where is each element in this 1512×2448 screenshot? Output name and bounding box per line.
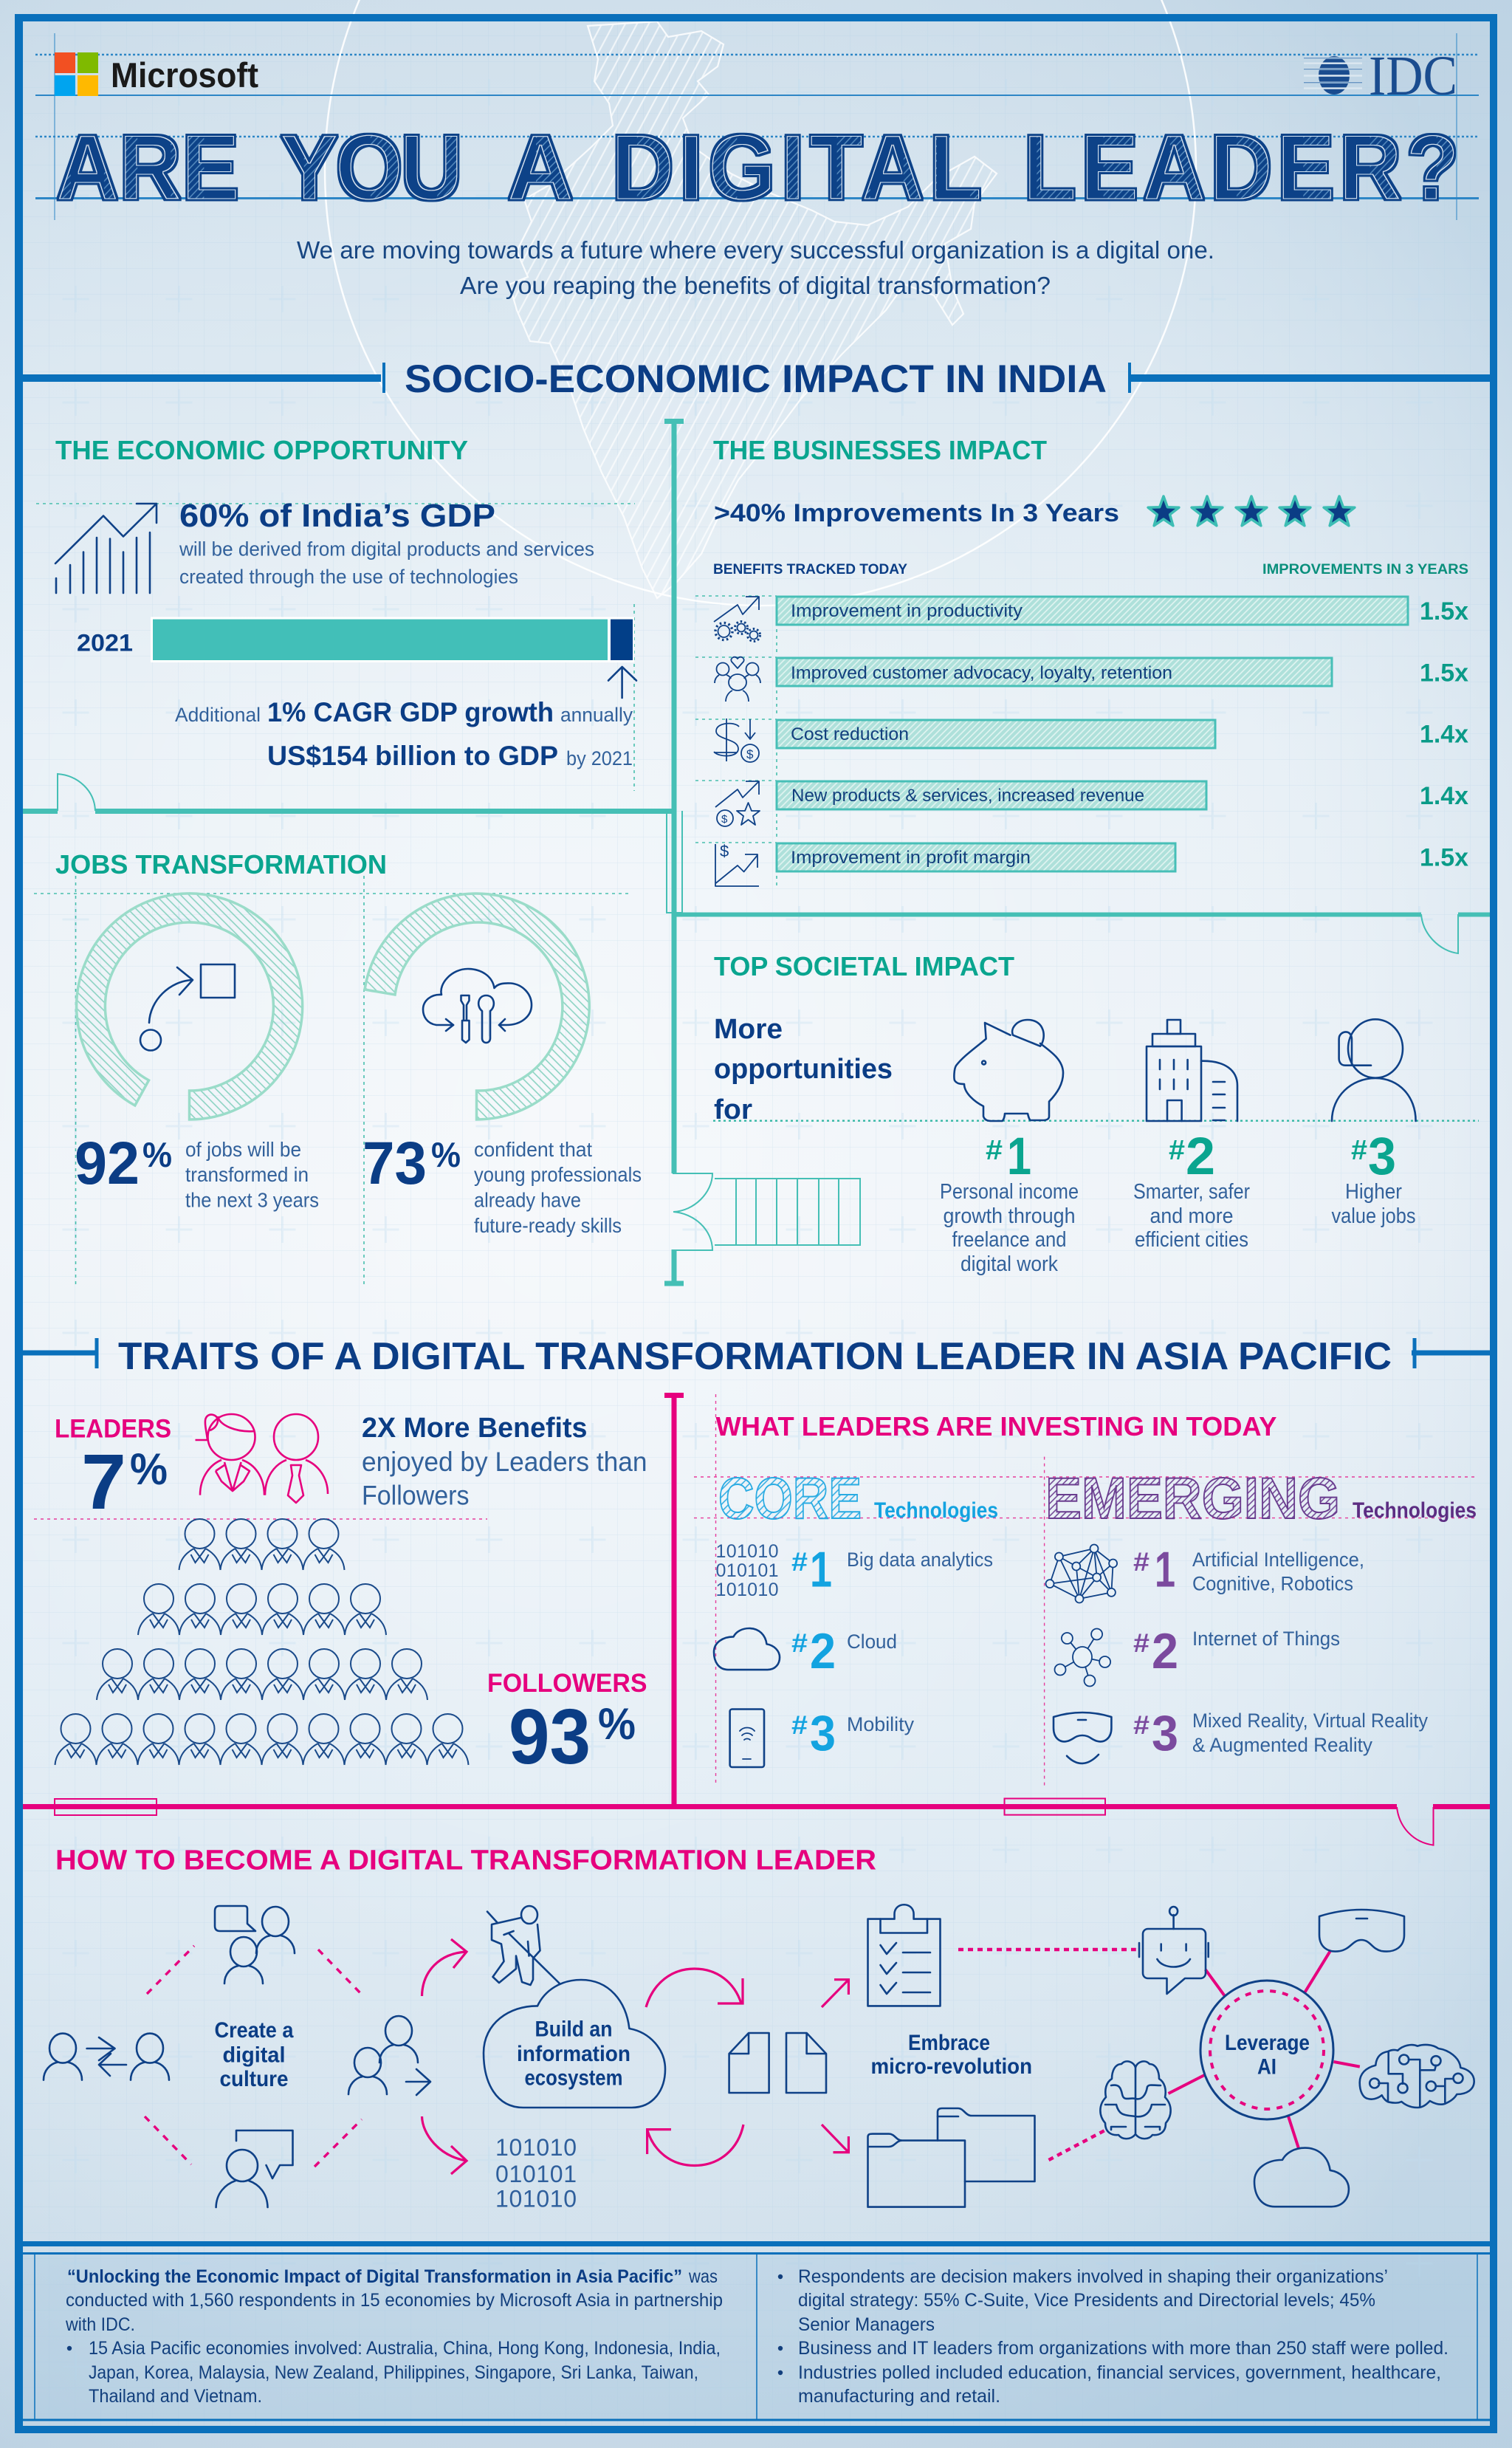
title: YOU: [281, 116, 463, 219]
emerging 3 label: & Augmented Reality: [1192, 1734, 1372, 1756]
label: create a digital culture: Create a: [214, 2018, 294, 2043]
stat: 73 percent: confident that: [474, 1138, 592, 1161]
gdp statement: will be derived from digital products and services: [179, 538, 594, 560]
emerging 2: [1133, 1623, 1178, 1679]
methodology right column: manufacturing and retail.: [798, 2386, 1000, 2407]
icon: person with headset: [1332, 1019, 1416, 1121]
arrows: dashed culture diamond: [145, 1946, 364, 2167]
lead text: opportunities: [714, 1054, 893, 1085]
gdp statement: created through the use of technologies: [179, 566, 518, 588]
methodology right column: Industries polled included education, financial services, government, healthcare,: [798, 2362, 1441, 2383]
methodology right column: digital strategy: 55% C-Suite, Vice Presidents and Directorial levels; 45%: [798, 2290, 1375, 2311]
bar labels: Cost reduction: [791, 724, 909, 744]
icon: mixed reality headset: [1054, 1712, 1111, 1763]
core 2: 2: [810, 1623, 836, 1679]
lead text: [714, 1014, 893, 1125]
stat: 73 percent: young professionals: [474, 1163, 642, 1186]
bar values: 1.4x: [1420, 721, 1468, 749]
section heading: traits of a digital transformation leader: TRAITS OF A DIGITAL TRANSFORMATION LEADER IN ASIA PACIFIC: [118, 1335, 1392, 1378]
heading: THE BUSINESSES IMPACT: [713, 435, 1047, 465]
stat: 92 percent: %: [142, 1135, 172, 1174]
panel: the businesses impact: [695, 435, 1468, 888]
core 3: [791, 1705, 836, 1761]
gdp statement: [179, 498, 594, 588]
title: ARE: [56, 116, 239, 219]
icon: two people exchanging: [44, 2034, 169, 2080]
improvements headline: >40% Improvements In 3 Years: [714, 499, 1119, 527]
label: embrace micro-revolution: micro-revolution: [871, 2054, 1032, 2079]
label: create a digital culture: digital: [223, 2043, 285, 2068]
rank 3 text: [1332, 1180, 1416, 1228]
bars: benefits: [777, 597, 1408, 871]
emerging technologies heading: Technologies: [1353, 1498, 1477, 1523]
methodology left column: was: [688, 2266, 718, 2287]
cagr text: annually: [560, 704, 633, 726]
icon: profit margin: $: [720, 842, 729, 860]
icon: five stars: [1148, 496, 1355, 526]
icon: piggy bank: [954, 1020, 1063, 1121]
logo: IDC: IDC: [1369, 45, 1457, 107]
emerging 1 label: [1192, 1549, 1364, 1595]
stat: 73 percent: 73: [362, 1130, 427, 1197]
emerging 2: #: [1133, 1629, 1150, 1658]
panel: leaders versus followers: [34, 1413, 647, 1780]
cagr text: [175, 697, 633, 771]
panel: jobs transformation: [34, 849, 642, 1286]
gdp statement: 60% of India’s GDP: [179, 498, 495, 534]
core 1: #: [791, 1548, 808, 1577]
stat: 92 percent: of jobs will be: [185, 1138, 301, 1161]
cagr text: US$154 billion to GDP: [267, 741, 558, 771]
label: build an information ecosystem: information: [517, 2042, 630, 2066]
label: create a digital culture: [214, 2018, 294, 2091]
stat: 73 percent: future-ready skills: [474, 1214, 622, 1237]
rank 1 text: digital work: [961, 1252, 1058, 1276]
rank 2 text: and more: [1150, 1204, 1233, 1228]
bar labels: Improvement in productivity: [791, 601, 1023, 621]
arrows: curved pink: [422, 1939, 467, 2174]
core 2: #: [791, 1629, 808, 1658]
icon: leverage AI hub: AI: [1257, 2055, 1276, 2080]
bar values: 1.4x: [1420, 782, 1468, 810]
emerging 2 label: Internet of Things: [1192, 1628, 1340, 1650]
panel: the economic opportunity: [36, 435, 636, 791]
heading: WHAT LEADERS ARE INVESTING IN TODAY: [716, 1411, 1277, 1441]
heading: THE ECONOMIC OPPORTUNITY: [55, 435, 468, 465]
icon: globe outline with hatched India map: [325, 0, 1196, 606]
icon: new products: [715, 781, 760, 826]
bar values: [1420, 597, 1468, 871]
icon: neural network: [1045, 1545, 1117, 1602]
donut: 92 percent: [77, 894, 303, 1120]
stat: 92 percent: [75, 1130, 319, 1211]
emerging 3 label: [1192, 1710, 1428, 1756]
rank 3 text: value jobs: [1332, 1204, 1416, 1228]
lead text: for: [714, 1094, 752, 1125]
rank 2 text: efficient cities: [1135, 1228, 1248, 1252]
emerging 3: 3: [1152, 1705, 1178, 1761]
donut: 73 percent: [365, 894, 589, 1120]
icon: binary data: 010101: [716, 1560, 778, 1581]
icon: folders: [868, 2108, 1035, 2207]
icon: transform shapes: [140, 964, 235, 1050]
icon: binary data: [716, 1541, 778, 1600]
panel: top societal impact: [713, 951, 1479, 1276]
teal floor-plan walls: [23, 421, 1490, 1283]
core technologies heading: CORE: [718, 1465, 862, 1531]
icon: smart city: [1147, 1020, 1237, 1121]
rank 1: #: [986, 1135, 1003, 1166]
emerging 3: #: [1133, 1711, 1150, 1740]
icon: person speaking: [216, 2130, 292, 2207]
cagr text: Additional: [175, 704, 261, 726]
icon: ecosystem cloud: [484, 1980, 665, 2108]
icon: profit margin: [715, 842, 759, 886]
bar: 2021 GDP: 2021: [77, 629, 133, 656]
emerging 1: 1: [1155, 1542, 1175, 1598]
label: build an information ecosystem: Build an: [535, 2017, 613, 2041]
methodology left column: 15 Asia Pacific economies involved: Australia, China, Hong Kong, Indonesia, India,: [89, 2338, 721, 2359]
icon: leverage AI hub: Leverage: [1225, 2031, 1310, 2055]
icon: productivity: [714, 597, 760, 641]
icon: follower crowd: [55, 1519, 468, 1765]
arrow: up: [608, 667, 636, 698]
arrows: straight pink: [822, 1980, 848, 2153]
emerging 3 label: Mixed Reality, Virtual Reality: [1192, 1710, 1428, 1732]
core 2: [791, 1623, 836, 1679]
icon: cloud: [714, 1628, 780, 1670]
benefit text: enjoyed by Leaders than: [362, 1447, 647, 1477]
column headers: IMPROVEMENTS IN 3 YEARS: [1262, 562, 1468, 577]
section heading: socio-economic impact: SOCIO-ECONOMIC IMPACT IN INDIA: [405, 357, 1107, 401]
cagr text: by 2021: [566, 747, 633, 769]
stat: 73 percent: %: [431, 1135, 461, 1174]
logo: Microsoft: Microsoft: [111, 55, 258, 95]
icon: binary data: 101010: [716, 1541, 778, 1562]
icon: team moving forward: [348, 2016, 430, 2095]
icon: documents: [729, 2033, 826, 2093]
leaders stat: LEADERS: [55, 1415, 171, 1443]
arrows: circular exchange: [646, 1969, 743, 2165]
logo: Microsoft: [55, 52, 258, 96]
core 1: [791, 1542, 832, 1598]
methodology left column: with IDC.: [65, 2314, 135, 2335]
rank 1 text: growth through: [944, 1204, 1075, 1228]
core 1 label: Big data analytics: [847, 1549, 993, 1571]
subtitle: We are moving towards a future where every successful organization is a digital one.: [297, 236, 1214, 264]
panel: what leaders are investing in today: [694, 1394, 1477, 1786]
icon: conversation group: [215, 1906, 295, 1984]
column headers: BENEFITS TRACKED TODAY: [713, 562, 907, 577]
label: build an information ecosystem: ecosystem: [524, 2066, 623, 2090]
bar: 2021 GDP: [77, 617, 634, 662]
heading: JOBS TRANSFORMATION: [55, 849, 387, 880]
methodology right column: Business and IT leaders from organizations with more than 250 staff were polled.: [798, 2338, 1449, 2359]
label: embrace micro-revolution: Embrace: [908, 2031, 990, 2055]
cagr text: 1% CAGR GDP growth: [267, 697, 554, 727]
leaders stat: %: [130, 1444, 168, 1494]
icon: binary block: 010101: [495, 2161, 577, 2187]
benefit text: [362, 1413, 647, 1511]
followers stat: %: [598, 1699, 636, 1749]
icon: circuit brain: [1360, 2045, 1474, 2108]
bar values: 1.5x: [1420, 597, 1468, 625]
benefit text: Followers: [362, 1481, 470, 1511]
leaders stat: [55, 1415, 171, 1526]
emerging technologies heading: EMERGING: [1045, 1465, 1340, 1531]
emerging 1: [1133, 1542, 1175, 1598]
rank 2 text: [1133, 1180, 1250, 1252]
icon: binary block: [495, 2134, 577, 2212]
methodology right column: Senior Managers: [798, 2314, 935, 2335]
core 3: 3: [810, 1705, 836, 1761]
methodology left column: [65, 2266, 723, 2407]
column headers: [713, 562, 1468, 577]
rank 3 text: Higher: [1345, 1180, 1402, 1204]
rank 3: 3: [1368, 1128, 1396, 1186]
methodology left column: Thailand and Vietnam.: [89, 2386, 262, 2407]
followers stat: 93: [509, 1693, 591, 1780]
icon: internet of things: [1054, 1629, 1110, 1687]
methodology left column: conducted with 1,560 respondents in 15 economies by Microsoft Asia in partnership: [66, 2290, 723, 2311]
bar values: 1.5x: [1420, 659, 1468, 687]
rank 3: #: [1351, 1135, 1367, 1166]
followers stat: FOLLOWERS: [487, 1669, 647, 1698]
followers stat: [487, 1669, 647, 1780]
title: A: [507, 117, 574, 219]
stat: 73 percent: [362, 1130, 642, 1237]
methodology right column: [778, 2266, 1449, 2407]
bar values: 1.5x: [1420, 843, 1468, 871]
bar labels: Improvement in profit margin: [791, 848, 1031, 868]
rank 1: [986, 1128, 1031, 1186]
rank 1 text: Personal income: [940, 1180, 1079, 1204]
rank 2: #: [1169, 1135, 1185, 1166]
magenta floor-plan walls: [23, 1395, 1490, 1845]
icon: cost reduction: [714, 719, 759, 762]
icon: binary block: 101010: [495, 2186, 577, 2212]
icon: cloud and tools: [423, 969, 532, 1043]
label: create a digital culture: culture: [220, 2067, 288, 2091]
icon: mobile device: [730, 1709, 764, 1767]
icon: growth chart: [55, 504, 157, 593]
panel: methodology footer: [23, 2254, 1490, 2420]
icon: headset large: [1319, 1910, 1404, 1952]
subtitle: [297, 236, 1214, 299]
icon: climber: [487, 1906, 560, 1985]
rank 1: 1: [1007, 1128, 1031, 1186]
emerging 2: 2: [1152, 1623, 1178, 1679]
bar labels: New products & services, increased revenue: [791, 786, 1144, 806]
bar labels: Improved customer advocacy, loyalty, retention: [791, 663, 1172, 683]
methodology right column: Respondents are decision makers involved in shaping their organizations’: [798, 2266, 1388, 2287]
rank 3: [1351, 1128, 1396, 1186]
title: [56, 116, 1459, 219]
rank 1 text: [940, 1180, 1079, 1276]
heading: TOP SOCIETAL IMPACT: [714, 951, 1014, 981]
leaders stat: 7: [81, 1439, 126, 1526]
core 1: 1: [810, 1542, 832, 1598]
rank 2: [1169, 1128, 1215, 1186]
icon: binary block: 101010: [495, 2134, 577, 2161]
icon: cloud small: [1254, 2148, 1349, 2207]
title: LEADER?: [1023, 116, 1459, 219]
core technologies heading: Technologies: [874, 1498, 998, 1523]
emerging 3: [1133, 1705, 1178, 1761]
icon: clipboard checklist: [868, 1904, 941, 2006]
methodology left column: Japan, Korea, Malaysia, New Zealand, Philippines, Singapore, Sri Lanka, Taiwan,: [89, 2362, 698, 2383]
stat: 73 percent: already have: [474, 1189, 581, 1211]
emerging 1: #: [1133, 1548, 1150, 1577]
connector: dotted pink: [958, 1950, 1136, 2160]
panel: how to become a digital transformation leader: [44, 1845, 1474, 2212]
benefit text: 2X More Benefits: [362, 1413, 588, 1444]
logo: IDC: [1304, 45, 1457, 107]
icon: binary data: 101010: [716, 1580, 778, 1600]
header guide lines: [35, 33, 1479, 220]
core 3 label: Mobility: [847, 1713, 914, 1735]
rank 2 text: Smarter, safer: [1133, 1180, 1250, 1204]
icon: customers and heart: [715, 657, 760, 702]
title: DIGITAL: [611, 116, 982, 219]
lead text: More: [714, 1014, 783, 1045]
connectors: solid pink spokes: [1168, 1950, 1360, 2148]
stat: 92 percent: the next 3 years: [185, 1189, 319, 1211]
core technologies heading: [718, 1465, 998, 1531]
icon: new products: $: [721, 813, 728, 826]
bar labels: [791, 601, 1172, 868]
rank 1 text: freelance and: [952, 1228, 1066, 1252]
methodology left column: “Unlocking the Economic Impact of Digital Transformation in Asia Pacific”: [67, 2266, 682, 2287]
core 2 label: Cloud: [847, 1631, 897, 1653]
stat: 92 percent: transformed in: [185, 1163, 309, 1186]
core 3: #: [791, 1711, 808, 1740]
icon: leverage AI hub: [1200, 1981, 1333, 2119]
stat: 92 percent: 92: [75, 1130, 140, 1197]
icon: leader pair: [195, 1414, 328, 1503]
label: build an information ecosystem: [517, 2017, 630, 2090]
rank 2: 2: [1186, 1128, 1215, 1186]
label: embrace micro-revolution: [871, 2031, 1032, 2079]
heading: HOW TO BECOME A DIGITAL TRANSFORMATION LEADER: [55, 1845, 876, 1876]
icon: chat robot: [1139, 1907, 1209, 1994]
emerging 1 label: Artificial Intelligence,: [1192, 1549, 1364, 1571]
icon: cost reduction: $: [746, 747, 754, 761]
icon: human brain: [1100, 2061, 1171, 2139]
emerging 1 label: Cognitive, Robotics: [1192, 1573, 1353, 1595]
section heading: socio-economic impact: [23, 357, 1490, 401]
subtitle: Are you reaping the benefits of digital transformation?: [460, 272, 1051, 299]
